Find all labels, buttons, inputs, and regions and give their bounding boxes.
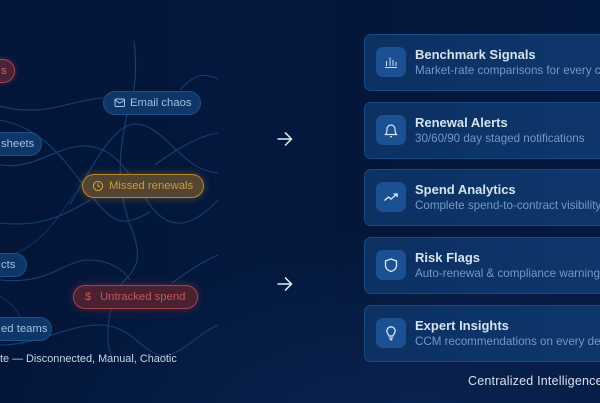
pill: Missed renewals: Missed renewals [109,180,193,192]
icon: clock [92,180,104,192]
caption: left side state: te — Disconnected, Manual, Chaotic [0,353,177,365]
icon: bar chart [376,47,406,77]
panel: Benchmark Signals [364,34,600,91]
description: 30/60/90 day staged notifications [415,132,585,145]
panel: Expert Insights [364,305,600,362]
icon: bell [376,115,406,145]
heading: Risk Flags [415,250,480,265]
heading: Expert Insights [415,318,509,333]
panel: Risk Flags [364,237,600,294]
icon: trend up [376,182,406,212]
pill: Untracked spend: Untracked spend [100,291,185,303]
heading: Benchmark Signals [415,47,536,62]
icon: dollar: $ [85,291,91,303]
pill: Email chaos [103,91,201,115]
pill: sheets: sheets [1,138,34,150]
pill: sheets [0,132,42,156]
pill: Email chaos: Email chaos [130,97,192,109]
pill: Untracked spend [73,285,198,309]
panel: Renewal Alerts [364,102,600,159]
icon: shield [376,250,406,280]
pill: teams fragment: ed teams [1,323,47,335]
caption: right side state: Centralized Intelligence [468,374,600,388]
panel: Spend Analytics [364,169,600,226]
description: Complete spend-to-contract visibility [415,199,600,212]
pill: partial red label [0,59,15,83]
pill: Missed renewals [82,174,204,198]
pill: teams fragment [0,317,52,341]
pill: contracts fragment [0,253,27,277]
pill: partial red label: s [1,65,7,77]
arrow: lower [278,277,292,291]
icon: light bulb [376,318,406,348]
arrow: upper [278,132,292,146]
tangled connection lines [0,41,218,358]
pill: contracts fragment: cts [1,259,15,271]
heading: Renewal Alerts [415,115,508,130]
heading: Spend Analytics [415,182,516,197]
icon: envelope [114,98,125,107]
